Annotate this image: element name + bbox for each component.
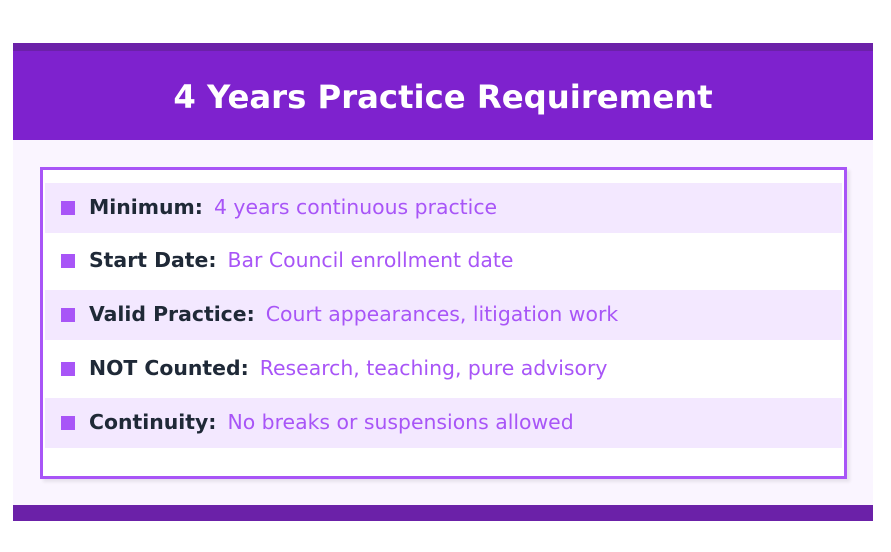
row: valid practice xyxy=(45,290,842,340)
row: minimum xyxy=(45,183,842,233)
row: minimum: Minimum: 4 years continuous practice xyxy=(89,195,497,219)
row: not counted: NOT Counted: Research, teaching, pure advisory xyxy=(89,356,607,380)
row: continuity xyxy=(45,398,842,448)
row: continuity: Continuity: No breaks or suspensions allowed xyxy=(89,410,574,434)
row: start date: Start Date: Bar Council enrollment date xyxy=(89,248,513,272)
title: 4 Years Practice Requirement xyxy=(173,78,713,116)
panel: requirements list xyxy=(40,167,847,479)
row: valid practice: Valid Practice: Court appearances, litigation work xyxy=(89,302,618,326)
